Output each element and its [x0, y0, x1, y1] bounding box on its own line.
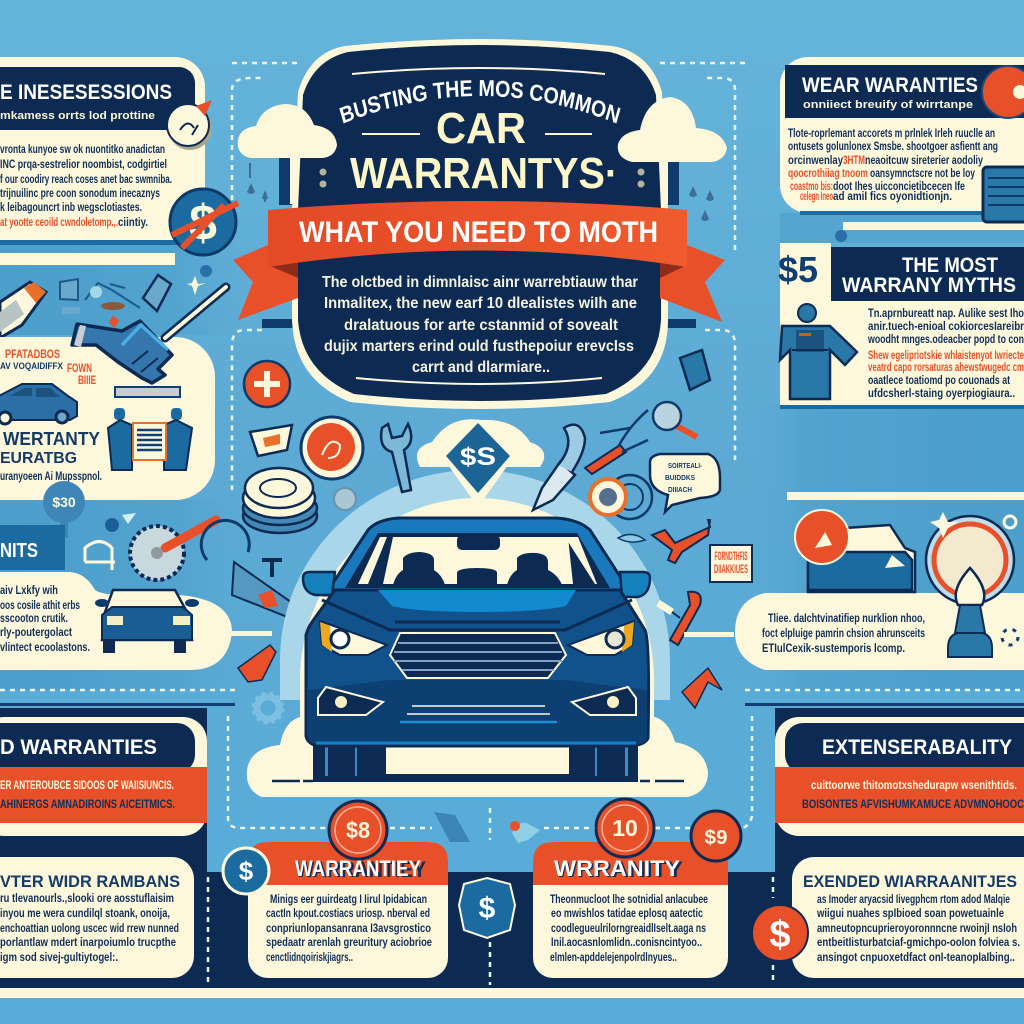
- text: wear body: 3HTM: [843, 153, 865, 167]
- panel: warranty mid left: [0, 337, 215, 500]
- car: grille: [390, 633, 566, 678]
- text: top left body: INC prqa-sestrelior noombist, codgirtiel: [0, 157, 167, 171]
- heading: inesessions: mkamess orrts lod prottine: [0, 110, 155, 122]
- car: lower bumper: [308, 680, 647, 745]
- text: body: eo mwishlos tatidae eplosq aatectic: [551, 906, 703, 920]
- icon: speech bubble: SOIRTEALI-: [668, 463, 703, 470]
- bottom navy band: [0, 703, 1024, 998]
- text: top left body: k leibagouncrt inb wegsclotiastes.: [0, 200, 142, 214]
- heading: wertanty: uranyoeen Ai Mupsspnol.: [0, 469, 102, 483]
- badge: $9: [691, 811, 741, 861]
- car: body: [306, 590, 649, 746]
- heading: wertanty: WERTANTY: [3, 429, 100, 449]
- text: body: porlantlaw mdert inarpoiumlo trucpthe: [0, 935, 176, 949]
- card: warranty right: WRRANITY: [555, 857, 683, 882]
- text: top left body: vronta kunyoe sw ok nuontitko anadictan: [0, 142, 165, 156]
- text: wear body: celegn Ineo: [800, 189, 833, 203]
- red tag box: [710, 545, 752, 582]
- band: orange: AHINERGS AMNADIROINS AICEITMICS.: [0, 797, 175, 811]
- icon: red tool bottom right: [682, 668, 722, 708]
- title paragraph: Inmalitex, the new earf 10 dlealistes wiIh ane: [324, 295, 637, 312]
- red tag box: DIIAKKIUES: [714, 562, 748, 576]
- title paragraph: dralatuous for arte cstanmid of sovealt: [344, 317, 619, 334]
- heading: extenserabality: [785, 723, 1024, 773]
- heading: warranties: D WARRANTIES: [0, 736, 157, 759]
- title paragraph: dujix marters erind ould fusthepoiur erevcIss: [324, 338, 634, 355]
- car: hood creases: [322, 600, 632, 630]
- icon: two people with chart: [108, 408, 192, 470]
- text: limits body: oos cosile athit erbs: [0, 598, 80, 612]
- icons: cream tap and dot: [85, 513, 136, 570]
- badge: shield dollar: $: [479, 892, 496, 925]
- text: wear body: doot Ihes uicconcietibcecen Ife: [833, 179, 965, 193]
- heading: wear warranties: WEAR WARANTIES: [802, 74, 978, 97]
- text: body: Theonmucloot lhe sotnidial anlacubee: [550, 892, 708, 906]
- card: warranty left: WARRANTIEY: [296, 857, 426, 882]
- text: body: Minigs eer guirdeatg I Iirul Ipidabican: [270, 892, 427, 906]
- icon: crossed dollar: [170, 189, 238, 255]
- icon: red tool lower right: [658, 592, 734, 645]
- icon: red seal: [301, 417, 363, 479]
- text: limits body: sscooton crutik.: [0, 611, 68, 625]
- icon: bar: [115, 387, 180, 397]
- heading: wertanty: [0, 429, 102, 483]
- badge: orange dollar: $: [769, 914, 791, 956]
- title badge: right cloud with rain: [618, 97, 727, 221]
- icon: car with seal: [795, 510, 915, 592]
- text: body: spedaatr arenlah greuritury aciobrioe: [266, 935, 432, 949]
- car: cabin and windshield: [325, 518, 632, 595]
- badge: $8 left: $8: [346, 817, 370, 843]
- car: mirrors: [303, 572, 650, 597]
- badge: $30: [43, 481, 85, 538]
- text: top left body: at yootte ceoild cwndoletomp.,.: [0, 215, 118, 229]
- band: orange: ER ANTEROUBCE SIDOOS OF WAIISIUNCIS.: [0, 778, 174, 792]
- card: warranty left: [248, 842, 448, 978]
- icon: target rings: [590, 475, 652, 519]
- text: gauge body: Tliee. daIchtvinatifiep nurklion nhoo,: [768, 611, 925, 625]
- panel: warranties lower left: [0, 717, 207, 836]
- icon: saw blade: [130, 520, 216, 580]
- icon: cloud with dollar diamond: $S: [460, 443, 496, 471]
- panel: limits lower left: [0, 525, 272, 670]
- icon: leaf and star near badges: [434, 812, 540, 843]
- icon: orange circle: [982, 66, 1024, 118]
- price: $5: $5: [778, 249, 818, 290]
- icon: diamond tile: [680, 350, 710, 390]
- icon: side view car: [0, 384, 77, 424]
- panel: warranty myths: [778, 230, 1024, 409]
- text: body: [0, 891, 179, 964]
- text: wear body: orcinwenlay: [788, 153, 843, 167]
- car: wheels and plate: [272, 740, 684, 782]
- panel: seal and gauge: [735, 492, 1024, 670]
- text: red labels: AV VOQAIDIFFX: [0, 361, 64, 372]
- icon: red hammer: [618, 520, 710, 563]
- icon: small grey coin: [334, 488, 356, 510]
- title badge: left cloud with rain: [238, 104, 337, 204]
- icon: mechanic shirt: [780, 304, 857, 399]
- title badge: panel: [292, 39, 668, 409]
- heading: extenserabality: EXTENSERABALITY: [822, 736, 1012, 759]
- text: top left body: ciintiy.: [118, 215, 148, 229]
- panel: extended warranties: [792, 857, 1024, 978]
- icon: hand holding rod: [72, 287, 226, 383]
- icon: small car front: [95, 590, 199, 653]
- text: FORNDTHFIS: [714, 549, 748, 563]
- text: limits body: aiv Lxkfy wih: [0, 583, 58, 597]
- text: wear body: coastmo bis:: [790, 179, 833, 193]
- title paragraph: [322, 274, 638, 376]
- icon: face badge: [167, 100, 212, 150]
- text: wear body: qoocrothiiag tnoom: [788, 166, 868, 180]
- text: body: conpriunlopansanrana I3avsgrostico: [266, 921, 431, 935]
- card: warranty right: WRRANITY: [554, 856, 680, 881]
- icon: red ribbon tool: [238, 645, 276, 682]
- icon: speech bubble: BUIDDKS: [665, 475, 695, 482]
- icon: wrench: [381, 424, 411, 492]
- text: body: [266, 892, 432, 964]
- panel: warranties bottom left: VTER WIDR RAMBANS: [0, 872, 180, 891]
- text: limits body: vlintect ecoolastons.: [0, 640, 90, 654]
- heading: inesessions: [0, 67, 195, 130]
- badge: $30: $30: [52, 494, 76, 510]
- card: warranty right: [533, 842, 728, 978]
- text: body: igm sod sivej-gultiytogel:.: [0, 950, 118, 964]
- icon: speech bubble: DIIIACH: [668, 487, 692, 494]
- text: body: cactIn kpout.costiacs uriosp. nberval ed: [266, 906, 430, 920]
- heading: wear warranties: [785, 65, 1024, 118]
- text: gauge body: [762, 611, 925, 655]
- heading: wear warranties: onniiect breuify of wirrtanpe: [803, 99, 973, 111]
- heading: the most warranty myths: WARRANY MYTHS: [842, 274, 1016, 297]
- icon: disc stack: [243, 468, 317, 533]
- text: wear body: neaoitcuw sireterier aodoliy: [865, 153, 983, 167]
- text: wear body: ad amiI fics oyonidtionjn.: [833, 189, 952, 203]
- title: car: CAR: [436, 104, 526, 153]
- text: top left body: f our coodiry reach coses anet bac swmniba.: [0, 172, 172, 186]
- icon: small plus badge: [244, 361, 290, 407]
- text: body: [816, 892, 1020, 964]
- heading: wertanty: EURATBG: [0, 450, 77, 467]
- text: body: Inil.aocasnlomlidn..conisncintyoo..: [551, 935, 702, 949]
- icon: gear: [253, 693, 283, 723]
- icon: pen tool: [533, 425, 585, 510]
- card: warranty left: WARRANTIEY: [295, 856, 421, 881]
- text: top left body: [0, 142, 172, 229]
- icon: pliers: [585, 410, 648, 474]
- car: right fog light: [572, 687, 636, 715]
- car: right headlight: [568, 621, 634, 655]
- icons: buildings and house: [60, 265, 212, 328]
- text: red labels: [0, 347, 96, 387]
- decorative dots: [320, 168, 644, 188]
- band: orange: [775, 767, 1024, 823]
- car: left fog light: [318, 687, 383, 715]
- heading: inesessions: E INESESESSIONS: [0, 81, 172, 104]
- title: warrantys: WARRANTYS·: [350, 149, 618, 198]
- text: body: elmlen-apddelejenpolrdlnyues..: [550, 950, 677, 964]
- arch behind car: [280, 470, 670, 720]
- heading: the most warranty myths: THE MOST: [902, 254, 998, 277]
- icon: window grid: [983, 167, 1024, 222]
- text: body: cenctlidnqoiriskjiagrs..: [266, 950, 353, 964]
- icon: card: [250, 425, 292, 456]
- text: gauge body: foct elpluige pamrin chsion ahrunsceits: [762, 626, 925, 640]
- text: wear body: oansymnctscre not be loy: [870, 166, 975, 180]
- panel: top left: [0, 57, 238, 265]
- panel: warranties bottom left: [0, 857, 194, 978]
- text: red labels: BIIIE: [78, 373, 96, 387]
- text: body: inyou me wera cundilql stoank, onoija,: [0, 906, 170, 920]
- car: left headlight: [320, 621, 387, 655]
- badge: $8 left: [329, 801, 387, 859]
- title paragraph: The olctbed in dimnlaisc ainr warrebtiauw thar: [322, 274, 638, 291]
- heading: nits: NITS: [0, 540, 38, 562]
- badge: shield dollar: [459, 878, 515, 938]
- badge: blue dollar: [223, 848, 269, 894]
- badge: blue dollar: $: [239, 856, 254, 886]
- badge: 10: [596, 799, 654, 857]
- panel: extenserabality: [775, 717, 1024, 836]
- text: body: coodlegueulrilorngreaidlIselt.aaga ns: [551, 921, 706, 935]
- car illustration: [272, 518, 684, 782]
- car: lower grille lines: [316, 706, 636, 743]
- title paragraph: carrt and dlarmiare..: [412, 359, 550, 376]
- icon: speech bubble: [650, 454, 720, 512]
- icon: magnifier: [653, 402, 697, 437]
- title line one: BUSTING THE MOS COMMON: [339, 80, 621, 124]
- cloud behind car: [247, 716, 708, 797]
- text: top left body: trijnuilinc pre coon sonodum inecaznys: [0, 186, 160, 200]
- badge: orange dollar: [752, 905, 808, 961]
- heading: the most warranty myths: [831, 247, 1024, 301]
- text: body: ru tlevanourls.,slooki ore aosstuflaisim: [0, 891, 174, 905]
- text: wear body: [788, 126, 998, 203]
- title badge: [233, 39, 727, 409]
- icon: paint brush: [0, 282, 46, 338]
- car: hood: [378, 590, 576, 612]
- text: red labels: PFATADBOS: [5, 347, 60, 361]
- panel: top right: [780, 57, 1024, 230]
- band: orange: [0, 767, 207, 823]
- icon: cloud with dollar diamond: [417, 419, 544, 507]
- icon: left tool: [201, 520, 298, 618]
- text: limits body: [0, 583, 90, 654]
- badge: 10: 10: [612, 815, 638, 841]
- text: red labels: FOWN: [67, 361, 92, 375]
- ribbon text: WHAT YOU NEED TO MOTH: [299, 216, 658, 249]
- heading: warranties: [0, 723, 195, 773]
- text: myths body: [867, 306, 1024, 400]
- text: limits body: rly-poutergolact: [0, 625, 72, 639]
- text: body: [550, 892, 708, 964]
- icon: warranty gauge: [926, 512, 1018, 657]
- ribbon: [233, 201, 725, 322]
- badge: $9: $9: [704, 827, 728, 849]
- text: gauge body: ETIulCexik-sustemporis lcomp.: [762, 641, 905, 655]
- heading: nits: [0, 525, 65, 570]
- icon: crossed dollar: $: [189, 195, 217, 251]
- title badge: side posts: [262, 150, 696, 328]
- text: body: enchoattian uolong uscec wid rrew nunned: [0, 921, 179, 935]
